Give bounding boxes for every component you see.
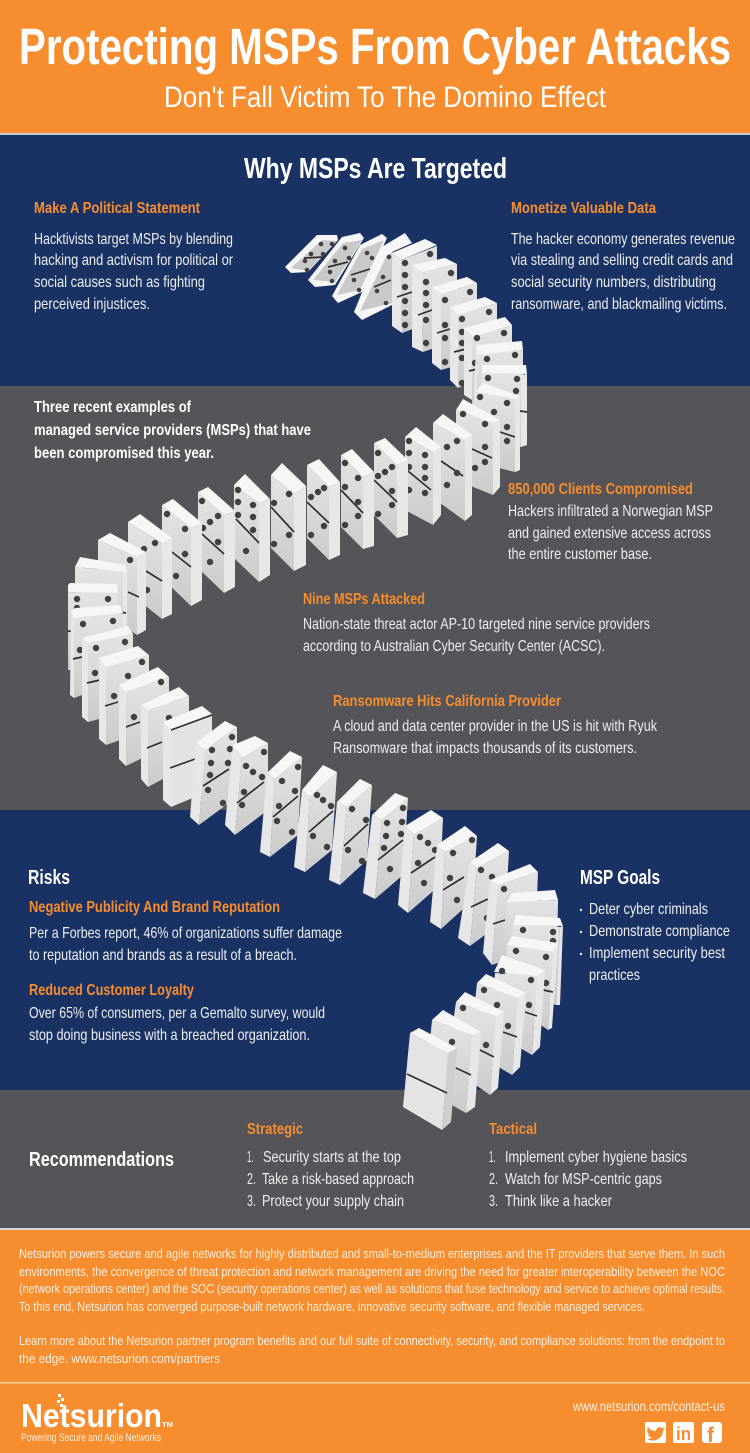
domino 22 [162, 499, 202, 606]
list: strategic [247, 1121, 414, 1210]
domino 26 [68, 583, 118, 670]
panel: risks: Over 65% of consumers, per a Gemalto survey, would [29, 1005, 325, 1022]
domino 17 [341, 449, 374, 549]
text block: political statement: social causes such as fighting [34, 274, 205, 291]
domino 32 [163, 706, 212, 807]
panel: risks: Reduced Customer Loyalty [29, 982, 194, 999]
icon: twitter [645, 1422, 666, 1443]
icon: facebook [702, 1422, 722, 1447]
text block: three recent examples [34, 399, 311, 462]
domino 40 [430, 826, 477, 929]
text block: monetize data [511, 200, 735, 313]
logo: Netsurion: Netsurion [21, 1397, 162, 1434]
domino 38 [363, 793, 408, 899]
text block: nine MSPs: Nine MSPs Attacked [303, 591, 425, 608]
text block: 850,000 clients: the entire customer base. [508, 546, 652, 563]
panel: MSP goals: Deter cyber criminals [589, 901, 708, 918]
panel: risks: Risks [28, 867, 70, 889]
list: tactical: 1. [489, 1149, 496, 1166]
domino 21 [198, 487, 235, 593]
text block: ransomware: Ransomware that impacts thousands of its customers. [333, 740, 637, 757]
list: strategic: Strategic [247, 1121, 303, 1138]
icon: facebook: f [707, 1424, 715, 1447]
domino 11 [482, 365, 527, 447]
list: tactical: Watch for MSP-centric gaps [505, 1171, 662, 1188]
domino 41 [458, 843, 509, 946]
text block: monetize data: Monetize Valuable Data [511, 200, 656, 217]
subtitle: Don't Fall Victim To The Domino Effect [164, 81, 607, 114]
domino 20 [234, 474, 270, 582]
domino 23 [128, 514, 172, 619]
text block: three recent examples: Three recent examples of [34, 399, 192, 416]
text block: nine MSPs: Nation-state threat actor AP-10 targeted nine service providers [303, 616, 650, 633]
domino 45 [505, 936, 558, 1030]
heading: why MSPs are targeted: Why MSPs Are Targeted [244, 153, 507, 185]
text block: three recent examples: managed service providers (MSPs) that have [34, 422, 311, 439]
domino 9 [464, 317, 512, 410]
list: tactical: 2. [489, 1171, 498, 1188]
text block: nine MSPs [303, 591, 650, 655]
text block: three recent examples: been compromised this year. [34, 445, 214, 462]
domino 49 [425, 1010, 481, 1113]
panel: risks: Negative Publicity And Brand Reputation [29, 899, 280, 916]
domino 15 [405, 427, 441, 525]
text block: ransomware: Ransomware Hits California Provider [333, 693, 561, 710]
panel: MSP goals [580, 867, 730, 984]
list: strategic: 1. [247, 1149, 254, 1166]
text block: nine MSPs: according to Australian Cyber Security Center (ACSC). [303, 638, 605, 655]
domino 36 [294, 765, 337, 872]
domino 44 [510, 915, 563, 1005]
domino chain illustration [68, 233, 563, 1130]
domino 4 [354, 233, 412, 320]
text block: about Netsurion [19, 1247, 725, 1366]
domino 10 [473, 341, 523, 430]
domino 2 [308, 233, 364, 287]
domino 19 [271, 463, 306, 571]
domino 12 [475, 383, 520, 472]
text block: about Netsurion: the edge. www.netsurion.com/partners [19, 1352, 220, 1366]
domino 13 [456, 399, 500, 495]
text block: political statement: hacking and activism for political or [34, 252, 233, 269]
panel: risks: to reputation and brands as a result of a breach. [29, 947, 297, 964]
domino 29 [99, 646, 149, 745]
domino 33 [190, 721, 237, 825]
domino 5 [392, 239, 437, 333]
panel: MSP goals: Implement security best [589, 945, 726, 962]
icon: linkedin [673, 1422, 694, 1444]
panel: risks [28, 867, 342, 1044]
logo: Netsurion: Powering Secure and Agile Networks [21, 1432, 161, 1444]
domino 43 [503, 890, 558, 960]
icon: linkedin: in [676, 1424, 691, 1444]
domino 16 [374, 438, 408, 538]
list: tactical [489, 1121, 687, 1210]
domino 35 [260, 751, 302, 857]
logo: Netsurion: TM [162, 1422, 173, 1429]
text block: about Netsurion: To this end, Netsurion has converged purpose-built network hardware, innovative security software, and flexible managed services. [19, 1300, 645, 1314]
domino 14 [433, 414, 472, 521]
text block: political statement [34, 200, 233, 313]
panel: MSP goals: MSP Goals [580, 867, 660, 889]
domino 6 [412, 258, 457, 352]
domino 48 [447, 992, 504, 1095]
domino 31 [141, 687, 189, 787]
domino 37 [329, 779, 372, 885]
list: tactical: Tactical [489, 1121, 537, 1138]
text block: 850,000 clients [508, 481, 713, 563]
list: tactical: 3. [489, 1193, 498, 1210]
text block: 850,000 clients: 850,000 Clients Compromised [508, 481, 693, 498]
panel: MSP goals: practices [589, 967, 640, 984]
domino 8 [450, 297, 497, 388]
domino 24 [98, 533, 146, 635]
list: strategic: Take a risk-based approach [262, 1171, 414, 1188]
domino 28 [82, 626, 133, 722]
panel: risks: Per a Forbes report, 46% of organizations suffer damage [29, 925, 342, 942]
domino 25 [75, 557, 127, 645]
domino 7 [432, 277, 477, 370]
domino 1 [285, 235, 338, 273]
text block: political statement: Make A Political Statement [34, 200, 201, 217]
domino 47 [470, 974, 526, 1075]
text block: political statement: Hacktivists target MSPs by blending [34, 231, 233, 248]
heading: recommendations: Recommendations [29, 1149, 174, 1171]
domino 39 [398, 810, 443, 913]
list: strategic: Security starts at the top [263, 1149, 401, 1166]
domino 50 [403, 1028, 457, 1130]
domino 27 [70, 605, 123, 698]
text block: political statement: perceived injustices. [34, 296, 150, 313]
list: tactical: Think like a hacker [505, 1193, 612, 1210]
domino 30 [119, 667, 169, 766]
domino 3 [332, 234, 387, 303]
text block: ransomware: A cloud and data center provider in the US is hit with Ryuk [333, 718, 657, 735]
list: strategic: Protect your supply chain [262, 1193, 404, 1210]
panel: risks: stop doing business with a breached organization. [29, 1027, 310, 1044]
list: tactical: Implement cyber hygiene basics [505, 1149, 687, 1166]
domino 46 [490, 955, 545, 1055]
domino 42 [483, 864, 538, 965]
domino 18 [307, 459, 340, 560]
list: strategic: 3. [247, 1193, 256, 1210]
text block: ransomware [333, 693, 657, 757]
list: strategic: 2. [247, 1171, 256, 1188]
domino 34 [225, 736, 268, 835]
